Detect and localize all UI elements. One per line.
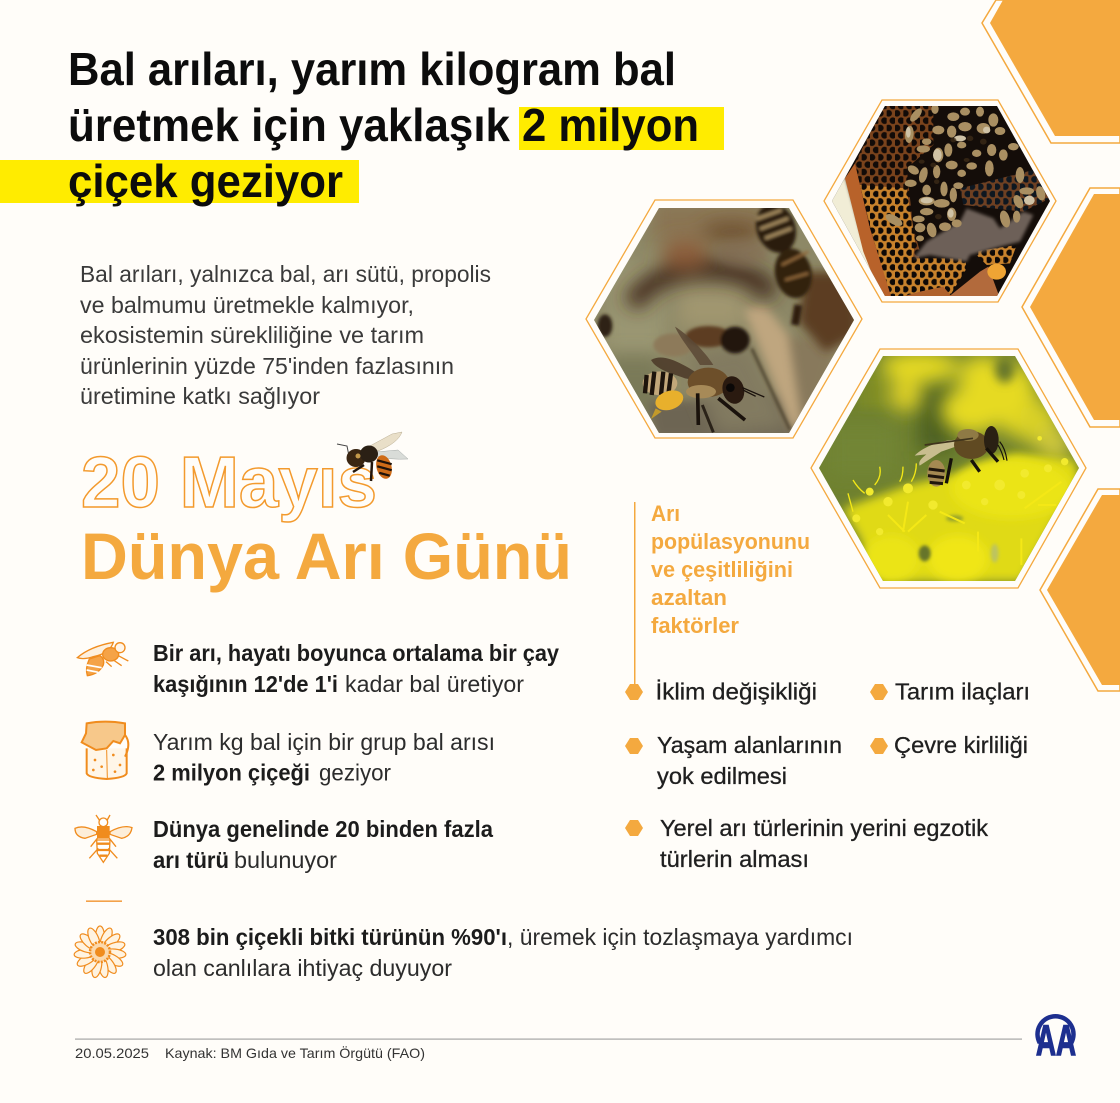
intro text block: üretimine katkı sağlıyor bbox=[80, 383, 320, 409]
intro text block: ürünlerinin yüzde 75'inden fazlasının bbox=[80, 353, 454, 379]
footer: date and source bbox=[75, 1044, 425, 1061]
intro text block bbox=[80, 261, 491, 409]
in-focus bee with pollen bbox=[643, 327, 764, 432]
logo: AA: AA bbox=[1036, 1017, 1076, 1065]
factor: pesticides: Tarım ilaçları bbox=[895, 678, 1030, 704]
factor: habitat loss: Yaşam alanlarının bbox=[657, 732, 842, 758]
factor: habitat loss bbox=[625, 732, 842, 789]
fact: bee species: bulunuyor bbox=[234, 847, 337, 873]
title: Bal arıları, yarım kilogram bal bbox=[68, 43, 676, 95]
fact: bee species bbox=[75, 815, 493, 873]
icon: honey jar bbox=[82, 722, 128, 779]
logo: AA bbox=[1036, 1016, 1076, 1065]
intro text block: Bal arıları, yalnızca bal, arı sütü, propolis bbox=[80, 261, 491, 287]
icon: flying bee photo bbox=[337, 432, 408, 481]
factor: pollution: Çevre kirliliği bbox=[894, 732, 1028, 758]
photo: bee with pollen on wooden plank bbox=[585, 198, 865, 442]
title: üretmek için yaklaşık bbox=[68, 99, 510, 151]
blurred background blossoms bbox=[880, 352, 1071, 462]
fact: pollination bbox=[74, 924, 853, 981]
fact: two million flowers: Yarım kg bal için bir grup bal arısı bbox=[153, 729, 495, 755]
factor: exotic species: Yerel arı türlerinin yerini egzotik bbox=[660, 815, 989, 841]
factor: climate change: İklim değişikliği bbox=[656, 678, 817, 704]
intro text block: ekosistemin sürekliliğine ve tarım bbox=[80, 322, 424, 348]
flower clusters bbox=[843, 453, 1080, 582]
factor: exotic species: türlerin alması bbox=[660, 846, 809, 872]
title: çiçek geziyor bbox=[68, 155, 343, 207]
fact: pollination: 308 bin çiçekli bitki türünün %90'ı bbox=[153, 924, 507, 950]
panel: decorative honeycomb cells on right edge bbox=[982, 0, 1120, 691]
icon: bee bbox=[77, 642, 128, 676]
title highlight bars bbox=[0, 107, 724, 203]
divider line bbox=[86, 900, 122, 902]
intro text block: ve balmumu üretmekle kalmıyor, bbox=[80, 292, 414, 318]
footer: date and source: Kaynak: BM Gıda ve Tarım Örgütü (FAO) bbox=[165, 1044, 425, 1061]
footer: date and source: 20.05.2025 bbox=[75, 1045, 149, 1061]
fact: bee species: Dünya genelinde 20 binden fazla bbox=[153, 816, 493, 842]
fact: pollination: , üremek için tozlaşmaya yardımcı bbox=[507, 924, 853, 950]
fact: honey per bee: kaşığının 12'de 1'i bbox=[153, 671, 338, 697]
title: 2 milyon bbox=[522, 99, 699, 151]
factor: habitat loss: yok edilmesi bbox=[657, 763, 787, 789]
factor: exotic species bbox=[625, 815, 989, 872]
fact: two million flowers bbox=[82, 722, 495, 786]
top bee bbox=[754, 208, 814, 328]
icon: bee top view bbox=[75, 815, 132, 862]
footer rule bbox=[75, 1038, 1022, 1040]
fact: honey per bee bbox=[77, 640, 559, 697]
fact: pollination: olan canlılara ihtiyaç duyuyor bbox=[153, 955, 452, 981]
blurred flying bee bbox=[632, 223, 772, 305]
heading: factors reducing bee population bbox=[651, 501, 810, 638]
heading: factors reducing bee population: azaltan bbox=[651, 585, 727, 610]
heading: factors reducing bee population: ve çeşitliliğini bbox=[651, 557, 793, 582]
bee on flower bbox=[915, 426, 1007, 487]
timeline rule: factors bbox=[634, 502, 636, 686]
heading: factors reducing bee population: faktörler bbox=[651, 613, 739, 638]
fact: honey per bee: Bir arı, hayatı boyunca ortalama bir çay bbox=[153, 640, 559, 666]
heading: factors reducing bee population: Arı bbox=[651, 501, 680, 526]
heading: factors reducing bee population: popülasyonunu bbox=[651, 529, 810, 554]
photo: honeycomb with bees bbox=[820, 100, 1060, 302]
fact: two million flowers: geziyor bbox=[319, 760, 391, 786]
fact: two million flowers: 2 milyon çiçeği bbox=[153, 760, 310, 786]
background walking bee bbox=[653, 326, 750, 357]
icon: flower bbox=[74, 926, 126, 978]
section title: 20 Mayıs: 20 Mayıs bbox=[81, 443, 377, 523]
fact: honey per bee: kadar bal üretiyor bbox=[345, 671, 524, 697]
section title: Dünya Arı Günü: Dünya Arı Günü bbox=[81, 519, 572, 593]
fact: bee species: arı türü bbox=[153, 847, 229, 873]
title bbox=[68, 43, 699, 207]
photo: bee on yellow flower bbox=[808, 349, 1088, 592]
